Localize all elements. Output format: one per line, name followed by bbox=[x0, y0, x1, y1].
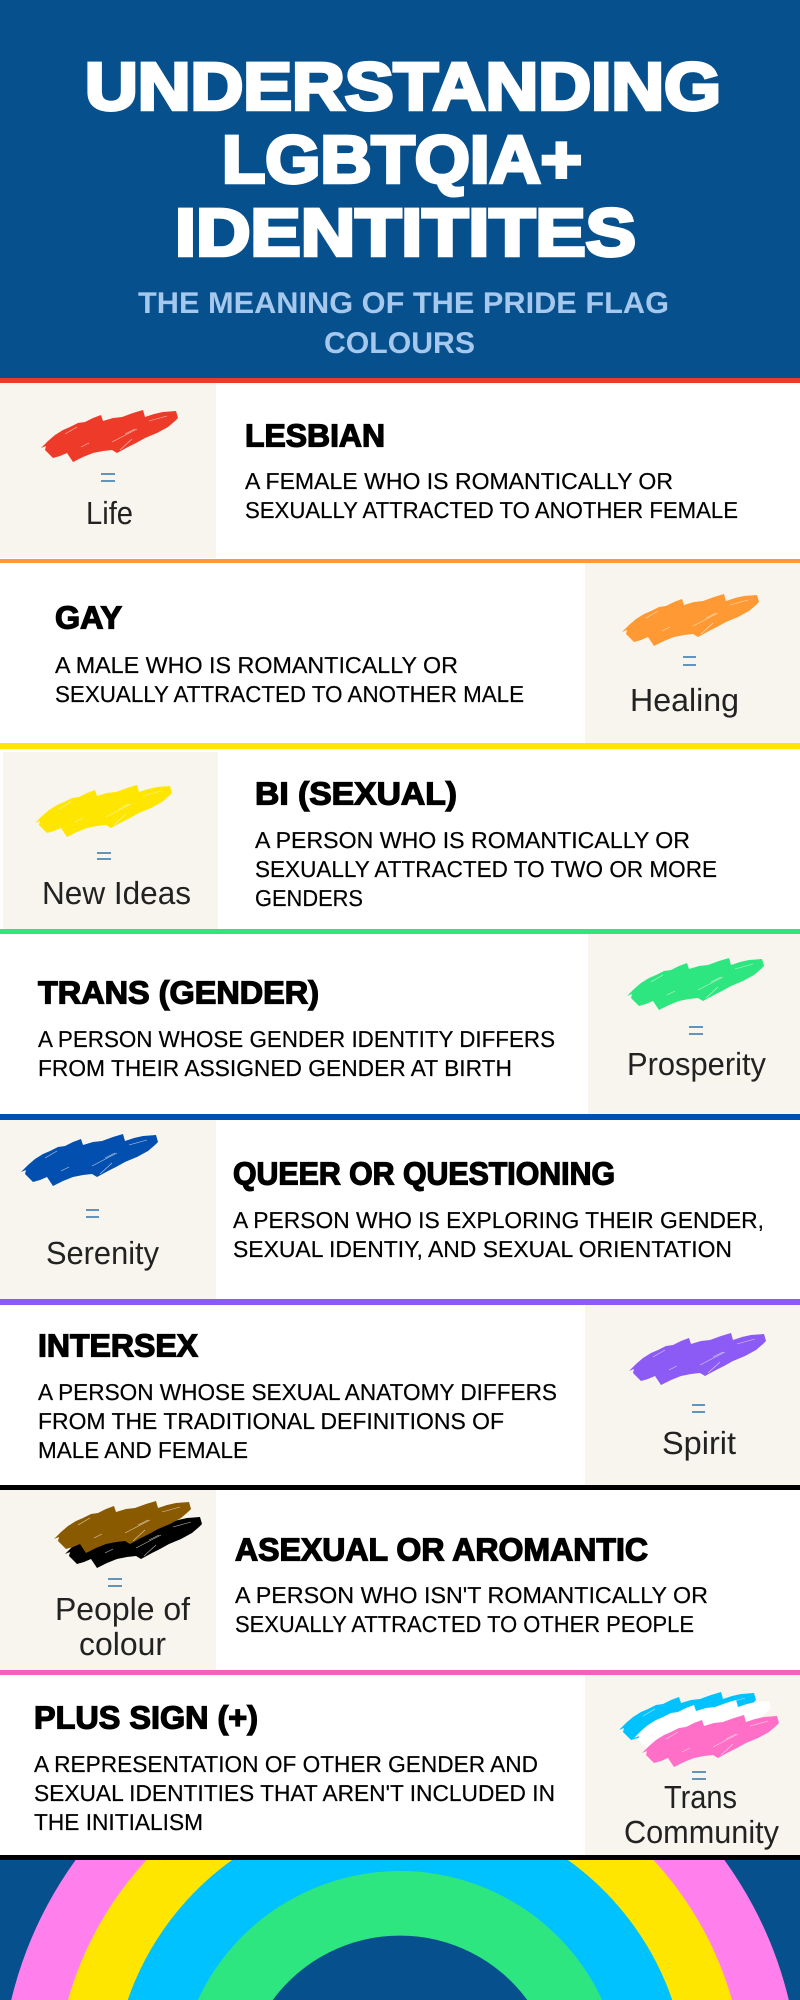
panel: transgender bbox=[0, 929, 800, 1115]
meaning: trans community bbox=[624, 1779, 779, 1850]
heading: asexual or aromantic: ASEXUAL OR AROMANTIC bbox=[235, 1532, 648, 1568]
definition: intersex: FROM THE TRADITIONAL DEFINITIONS OF bbox=[38, 1408, 504, 1434]
definition: bisexual: A PERSON WHO IS ROMANTICALLY OR bbox=[255, 827, 690, 853]
definition: plus sign bbox=[34, 1751, 555, 1835]
heading: gay: GAY bbox=[55, 600, 122, 636]
definition: queer or questioning: SEXUAL IDENTIY, AND SEXUAL ORIENTATION bbox=[233, 1236, 732, 1262]
rainbow illustration bbox=[11, 1860, 789, 2000]
subtitle: THE MEANING OF THE PRIDE FLAG bbox=[138, 287, 669, 320]
meaning: serenity: Serenity bbox=[46, 1235, 159, 1271]
title: UNDERSTANDING bbox=[85, 50, 721, 124]
panel: plus sign bbox=[0, 1670, 800, 1856]
definition: queer or questioning bbox=[233, 1207, 764, 1262]
icon: green brush stroke bbox=[627, 958, 764, 1010]
meaning: people of colour bbox=[55, 1591, 190, 1662]
meaning: prosperity: Prosperity bbox=[627, 1046, 766, 1082]
definition: asexual or aromantic: SEXUALLY ATTRACTED TO OTHER PEOPLE bbox=[235, 1611, 694, 1637]
definition: transgender: A PERSON WHOSE GENDER IDENTITY DIFFERS bbox=[38, 1026, 555, 1052]
icon: blue brush stroke bbox=[21, 1134, 158, 1186]
definition: lesbian: A FEMALE WHO IS ROMANTICALLY OR bbox=[245, 468, 673, 494]
definition: gay: SEXUALLY ATTRACTED TO ANOTHER MALE bbox=[55, 681, 524, 707]
icon: yellow brush stroke bbox=[35, 785, 172, 837]
definition: bisexual: GENDERS bbox=[255, 885, 363, 911]
definition: bisexual: SEXUALLY ATTRACTED TO TWO OR MORE bbox=[255, 856, 717, 882]
definition: plus sign: SEXUAL IDENTITIES THAT AREN'T INCLUDED IN bbox=[34, 1780, 555, 1806]
heading: lesbian: LESBIAN bbox=[245, 418, 385, 454]
subtitle bbox=[138, 287, 669, 360]
equals sign bbox=[692, 1405, 705, 1412]
equals sign bbox=[101, 474, 115, 481]
heading: bi (sexual): BI (SEXUAL) bbox=[255, 776, 457, 812]
panel: lesbian bbox=[0, 378, 800, 559]
definition: intersex: A PERSON WHOSE SEXUAL ANATOMY DIFFERS bbox=[38, 1379, 557, 1405]
meaning: people of colour: colour bbox=[79, 1626, 166, 1662]
meaning: trans community: Trans bbox=[664, 1779, 737, 1815]
meaning: spirit: Spirit bbox=[662, 1425, 736, 1461]
definition: lesbian: SEXUALLY ATTRACTED TO ANOTHER FEMALE bbox=[245, 497, 738, 523]
meaning: life: Life bbox=[86, 495, 133, 531]
definition: bisexual bbox=[255, 827, 717, 911]
title: LGBTQIA+ bbox=[222, 122, 582, 198]
icon: trans flag brush strokes bbox=[619, 1692, 779, 1767]
panel: asexual or aromantic bbox=[0, 1485, 800, 1671]
equals sign bbox=[97, 853, 111, 859]
equals sign bbox=[683, 657, 696, 665]
equals sign bbox=[689, 1027, 703, 1034]
definition: plus sign: THE INITIALISM bbox=[34, 1809, 203, 1835]
title: IDENTITITES bbox=[175, 196, 636, 270]
header: title and subtitle bbox=[85, 50, 721, 360]
heading: plus sign: PLUS SIGN (+) bbox=[34, 1700, 258, 1736]
definition: lesbian bbox=[245, 468, 738, 523]
definition: transgender: FROM THEIR ASSIGNED GENDER AT BIRTH bbox=[38, 1055, 512, 1081]
heading: intersex: INTERSEX bbox=[38, 1328, 199, 1364]
definition: asexual or aromantic bbox=[235, 1582, 708, 1637]
definition: intersex: MALE AND FEMALE bbox=[38, 1437, 248, 1463]
panel: intersex bbox=[0, 1299, 800, 1486]
definition: asexual or aromantic: A PERSON WHO ISN'T ROMANTICALLY OR bbox=[235, 1582, 708, 1608]
definition: plus sign: A REPRESENTATION OF OTHER GENDER AND bbox=[34, 1751, 538, 1777]
definition: gay bbox=[55, 652, 524, 707]
icon: red brush stroke bbox=[41, 410, 178, 462]
icon: purple brush stroke bbox=[629, 1333, 766, 1385]
definition: queer or questioning: A PERSON WHO IS EXPLORING THEIR GENDER, bbox=[233, 1207, 764, 1233]
meaning: healing: Healing bbox=[630, 682, 739, 718]
definition: intersex bbox=[38, 1379, 557, 1463]
meaning: people of colour: People of bbox=[55, 1591, 190, 1627]
equals sign bbox=[692, 1772, 706, 1779]
definition: transgender bbox=[38, 1026, 555, 1081]
subtitle: COLOURS bbox=[324, 327, 475, 360]
meaning: trans community: Community bbox=[624, 1814, 779, 1850]
icon: brown and black brush strokes bbox=[54, 1501, 202, 1568]
heading: trans (gender): TRANS (GENDER) bbox=[38, 974, 319, 1010]
equals sign bbox=[86, 1210, 99, 1217]
equals sign bbox=[108, 1579, 122, 1586]
title bbox=[85, 50, 721, 270]
definition: gay: A MALE WHO IS ROMANTICALLY OR bbox=[55, 652, 458, 678]
heading: queer or questioning: QUEER OR QUESTIONING bbox=[233, 1156, 615, 1192]
panel: bisexual bbox=[0, 743, 800, 930]
panel: gay bbox=[0, 559, 800, 744]
icon: orange brush stroke bbox=[622, 594, 759, 646]
meaning: new ideas: New Ideas bbox=[42, 875, 191, 911]
panel: queer or questioning bbox=[0, 1114, 800, 1300]
